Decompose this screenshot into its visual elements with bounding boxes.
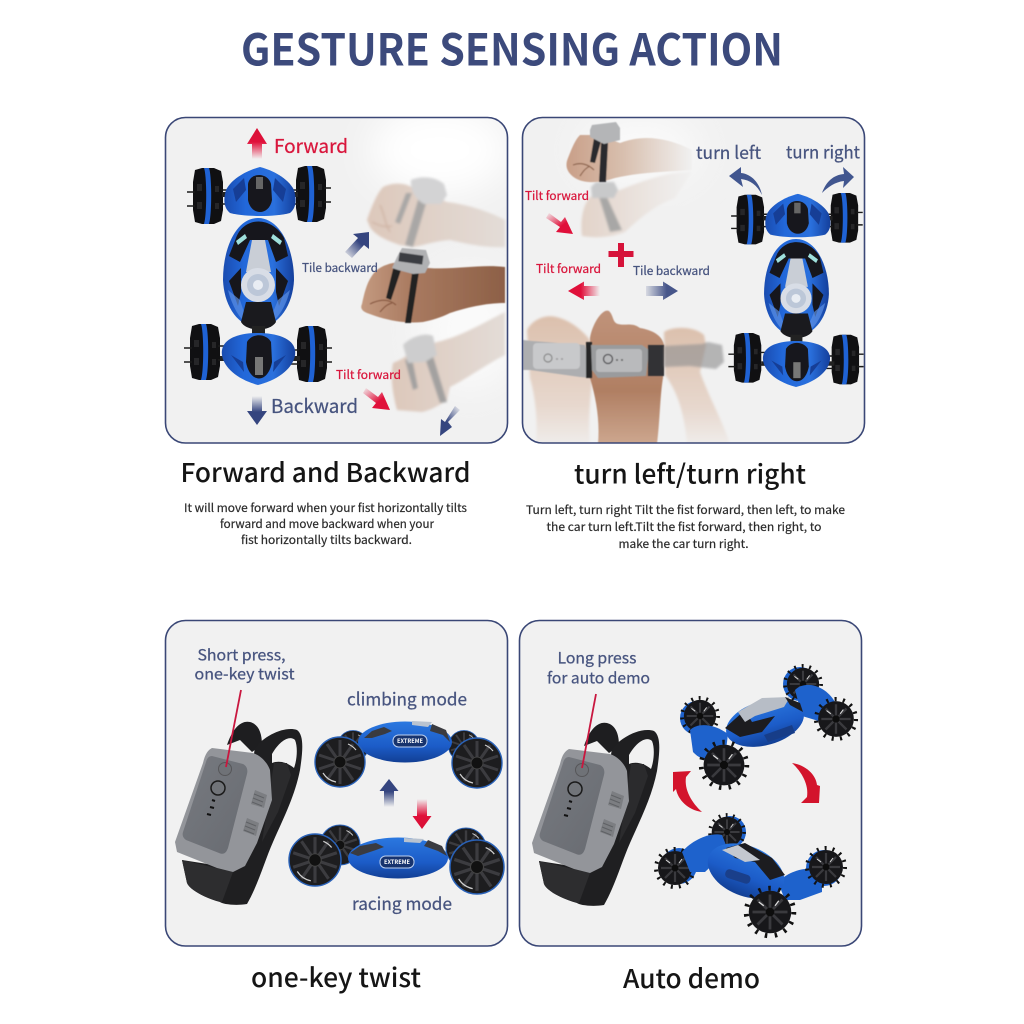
arrow: tilt forward upper	[546, 213, 573, 234]
icon: lower faded hand	[392, 312, 505, 412]
arrow: left red	[568, 282, 600, 300]
arrow: turn right	[822, 167, 854, 193]
label: tilt forward: Tilt forward	[336, 366, 401, 383]
panel: forward and backward	[166, 105, 520, 443]
label: racing mode: racing mode	[352, 891, 452, 916]
title: GESTURE SENSING ACTION	[241, 14, 783, 78]
text block: turn description: Turn left, turn right Tilt the fist forward, then left, to make	[526, 502, 845, 518]
panel border	[166, 118, 508, 443]
text block: turn description: make the car turn right.	[618, 536, 748, 552]
heading: one-key twist: one-key twist	[251, 958, 421, 995]
icon: top hand	[566, 122, 692, 182]
text block: forward and backward description: fist horizontally tilts backward.	[241, 532, 412, 548]
heading: turn left and right: turn left/turn right	[574, 454, 806, 492]
arrow: up navy	[380, 779, 398, 807]
label: short press: Short press,	[198, 644, 286, 666]
icon: faded rear wristband	[664, 342, 724, 369]
panel: turn left and right	[522, 115, 864, 444]
label: short press	[194, 644, 295, 684]
label: tilt forward upper: Tilt forward	[525, 187, 589, 204]
icon: racing mode car: EXTREME	[384, 857, 410, 866]
arrow: right navy	[646, 282, 678, 300]
label: tile backward: Tile backward	[302, 259, 378, 276]
arrow: rotate down red	[792, 763, 820, 803]
arrow: rotate up red	[673, 771, 702, 812]
label: turn right: turn right	[786, 140, 860, 164]
icon: right faded fist	[664, 328, 730, 444]
arrow: tilt forward down	[440, 406, 460, 436]
icon: racing mode car	[289, 825, 504, 894]
text block: turn description	[526, 502, 845, 552]
icon: center fist	[590, 311, 664, 444]
text block: forward and backward description: It will move forward when your fist horizontally tilts	[184, 500, 467, 516]
icon: wristband	[175, 722, 302, 905]
icon: plus sign	[608, 243, 634, 267]
panel: auto demo	[520, 620, 862, 946]
panel: one-key twist	[166, 620, 508, 946]
icon: left faded fist	[527, 316, 592, 444]
arrow: tilt backward up	[345, 232, 369, 258]
label: tile backward: Tile backward	[633, 262, 710, 279]
icon: top tumbling car	[680, 666, 856, 788]
label: climbing mode: climbing mode	[347, 686, 467, 712]
text block: forward and backward description: forward and move backward when your	[220, 516, 435, 532]
label: short press: one-key twist	[194, 662, 295, 684]
icon: middle hand with wristband	[361, 248, 505, 323]
arrow: backward	[247, 396, 267, 425]
text block: turn description: the car turn left.Tilt the fist forward, then right, to	[546, 519, 822, 535]
icon: car top view	[728, 193, 864, 387]
label: long press: for auto demo	[547, 666, 650, 688]
icon: wrist straps	[523, 340, 664, 378]
arrow: turn left	[729, 167, 762, 195]
icon: climbing mode car: EXTREME	[397, 736, 423, 745]
arrow: tilt forward red	[363, 388, 390, 410]
label: backward: Backward	[271, 392, 358, 419]
callout line	[582, 694, 596, 768]
callout line	[226, 690, 241, 767]
icon: upper faded hand	[367, 177, 505, 247]
panel border	[522, 118, 864, 443]
label: forward: Forward	[274, 132, 348, 159]
icon: bottom tumbling car	[656, 815, 845, 936]
heading: forward and backward: Forward and Backward	[180, 453, 470, 490]
icon: car top view	[184, 166, 332, 385]
icon: climbing mode car	[315, 721, 502, 788]
arrow: down red	[412, 799, 432, 829]
label: tilt forward lower: Tilt forward	[536, 260, 601, 277]
icon: faded second hand	[580, 174, 679, 238]
label: turn left: turn left	[696, 140, 761, 165]
label: long press	[547, 646, 650, 688]
heading: auto demo: Auto demo	[623, 959, 760, 996]
text block: forward and backward description	[184, 500, 467, 548]
icon: wristband	[532, 723, 659, 906]
label: long press: Long press	[558, 646, 636, 668]
arrow: forward	[247, 128, 267, 159]
